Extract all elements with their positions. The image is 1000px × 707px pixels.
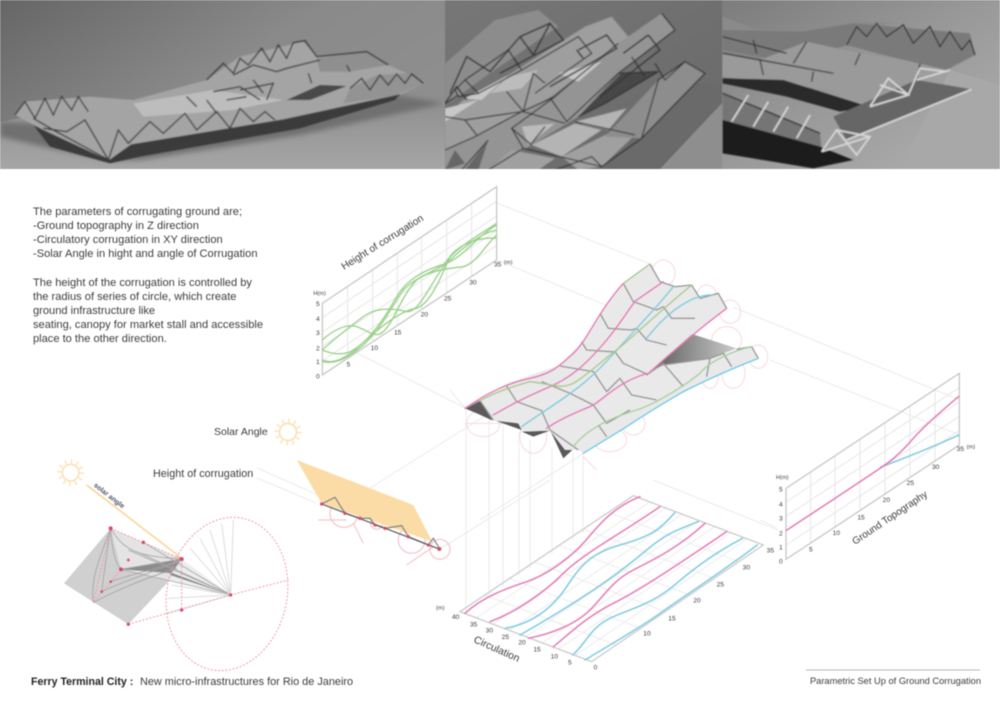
chart: ground topography: 10 bbox=[833, 530, 840, 537]
text block: parameters description: -Ground topography in Z direction bbox=[33, 220, 199, 232]
text block: parameters description: The parameters of corrugating ground are; bbox=[33, 206, 242, 218]
chart: height of corrugation: 10 bbox=[371, 345, 378, 352]
chart: circulation plan: 30 bbox=[743, 565, 750, 572]
photo: model side view bbox=[0, 0, 445, 169]
chart: ground topography: 25 bbox=[907, 480, 914, 487]
chart: circulation plan: 35 bbox=[470, 622, 478, 629]
footer title bbox=[31, 676, 353, 688]
chart: height of corrugation bbox=[313, 187, 513, 380]
diagram: solar angle construction bbox=[59, 461, 302, 682]
footer title: Ferry Terminal City : bbox=[31, 676, 133, 688]
text block: parameters description bbox=[33, 206, 263, 345]
footer title: New micro-infrastructures for Rio de Janeiro bbox=[140, 676, 353, 688]
chart: height of corrugation: 4 bbox=[316, 316, 320, 323]
chart: height of corrugation: 25 bbox=[444, 296, 452, 303]
chart: height of corrugation: 15 bbox=[394, 329, 402, 336]
chart: ground topography: 3 bbox=[779, 516, 783, 523]
chart: height of corrugation: 3 bbox=[316, 330, 320, 337]
chart: height of corrugation: 30 bbox=[469, 280, 477, 287]
chart: height of corrugation: 0 bbox=[316, 373, 320, 380]
text block: parameters description: -Circulatory corrugation in XY direction bbox=[33, 234, 223, 246]
surface fill bbox=[465, 264, 758, 453]
chart: ground topography: 5 bbox=[809, 547, 813, 554]
chart: height of corrugation: H(m) bbox=[313, 291, 326, 297]
grey cross lines bbox=[465, 264, 758, 450]
chart: circulation plan: 15 bbox=[668, 616, 676, 623]
chart: ground topography: 20 bbox=[883, 497, 890, 504]
label: solar angle with sun icon bbox=[214, 420, 300, 444]
chart: ground topography: 30 bbox=[932, 464, 940, 471]
icon: sun bbox=[276, 420, 300, 444]
chart: circulation plan: 15 bbox=[533, 647, 541, 654]
photo: model close-up bbox=[445, 0, 722, 170]
heading: circulation: Circulation bbox=[472, 635, 521, 665]
text block: parameters description: place to the other direction. bbox=[33, 333, 167, 345]
chart: circulation plan: 20 bbox=[518, 640, 526, 647]
solar ray bbox=[87, 485, 182, 558]
coloured flow lines bbox=[465, 264, 758, 453]
chart: ground topography: 35 bbox=[957, 446, 964, 453]
heading: height of corrugation: Height of corrugation bbox=[340, 213, 426, 273]
text block: parameters description: -Solar Angle in hight and angle of Corrugation bbox=[33, 248, 258, 260]
text block: parameters description: The height of the corrugation is controlled by bbox=[33, 277, 252, 289]
chart: ground topography bbox=[776, 373, 975, 565]
chart: ground topography: 5 bbox=[779, 487, 783, 494]
label: solar angle with sun icon: Solar Angle bbox=[214, 426, 268, 438]
chart: circulation plan: 5 bbox=[568, 660, 572, 667]
chart: ground topography: 2 bbox=[779, 531, 783, 538]
chart: circulation plan: 10 bbox=[551, 653, 558, 660]
chart: circulation plan: 25 bbox=[502, 634, 509, 641]
text block: parameters description: the radius of series of circle, which create bbox=[33, 291, 236, 303]
chart: circulation plan: 35 bbox=[767, 547, 774, 554]
shaded square and fans bbox=[64, 528, 183, 624]
surface: corrugated ground model bbox=[465, 260, 768, 470]
chart: circulation plan: 40 bbox=[452, 614, 460, 621]
green height curves bbox=[322, 223, 497, 362]
chart: height of corrugation: 1 bbox=[316, 359, 320, 366]
footer caption: Parametric Set Up of Ground Corrugation bbox=[810, 676, 981, 686]
text block: parameters description: seating, canopy for market stall and accessible bbox=[33, 319, 263, 331]
text block: parameters description: ground infrastructure like bbox=[33, 305, 155, 317]
chart: height of corrugation: 20 bbox=[421, 312, 428, 319]
photo: model underside view bbox=[722, 0, 1000, 169]
chart: height of corrugation: (m) bbox=[504, 260, 513, 266]
chart: circulation plan: 30 bbox=[486, 627, 493, 634]
flow lines bbox=[465, 497, 757, 660]
chart: circulation plan: 25 bbox=[717, 581, 724, 588]
photo strip bbox=[0, 0, 1000, 170]
chart: circulation plan: 20 bbox=[693, 597, 701, 604]
chart: circulation plan: 10 bbox=[643, 631, 651, 638]
chart: height of corrugation: 2 bbox=[316, 346, 320, 353]
chart: ground topography: 1 bbox=[779, 545, 783, 552]
chart: height of corrugation: 5 bbox=[316, 301, 320, 308]
icon: sun bbox=[59, 461, 82, 484]
dashed radius ellipse bbox=[93, 506, 302, 682]
chart: circulation plan bbox=[436, 496, 774, 672]
underside shadow bbox=[465, 401, 573, 458]
chart: ground topography: 4 bbox=[779, 502, 783, 509]
faint radius circles bbox=[465, 260, 768, 470]
heading: ground topography: Ground Topography bbox=[851, 489, 930, 547]
label: height of corrugation: Height of corrugation bbox=[153, 468, 253, 480]
diagram: solar canopy section bbox=[297, 460, 450, 565]
chart: ground topography: H(m) bbox=[776, 475, 789, 481]
chart: ground topography: (m) bbox=[967, 445, 975, 451]
chart: circulation plan: (m) bbox=[436, 605, 445, 611]
chart: circulation plan: 0 bbox=[594, 665, 598, 672]
construction lines connecting the charts bbox=[257, 203, 960, 611]
chart: ground topography: 0 bbox=[779, 558, 783, 565]
chart: ground topography: 15 bbox=[857, 514, 865, 521]
chart: height of corrugation: 35 bbox=[494, 262, 502, 269]
label: solar angle: solar angle bbox=[92, 482, 126, 510]
chart: height of corrugation: 5 bbox=[347, 362, 351, 369]
